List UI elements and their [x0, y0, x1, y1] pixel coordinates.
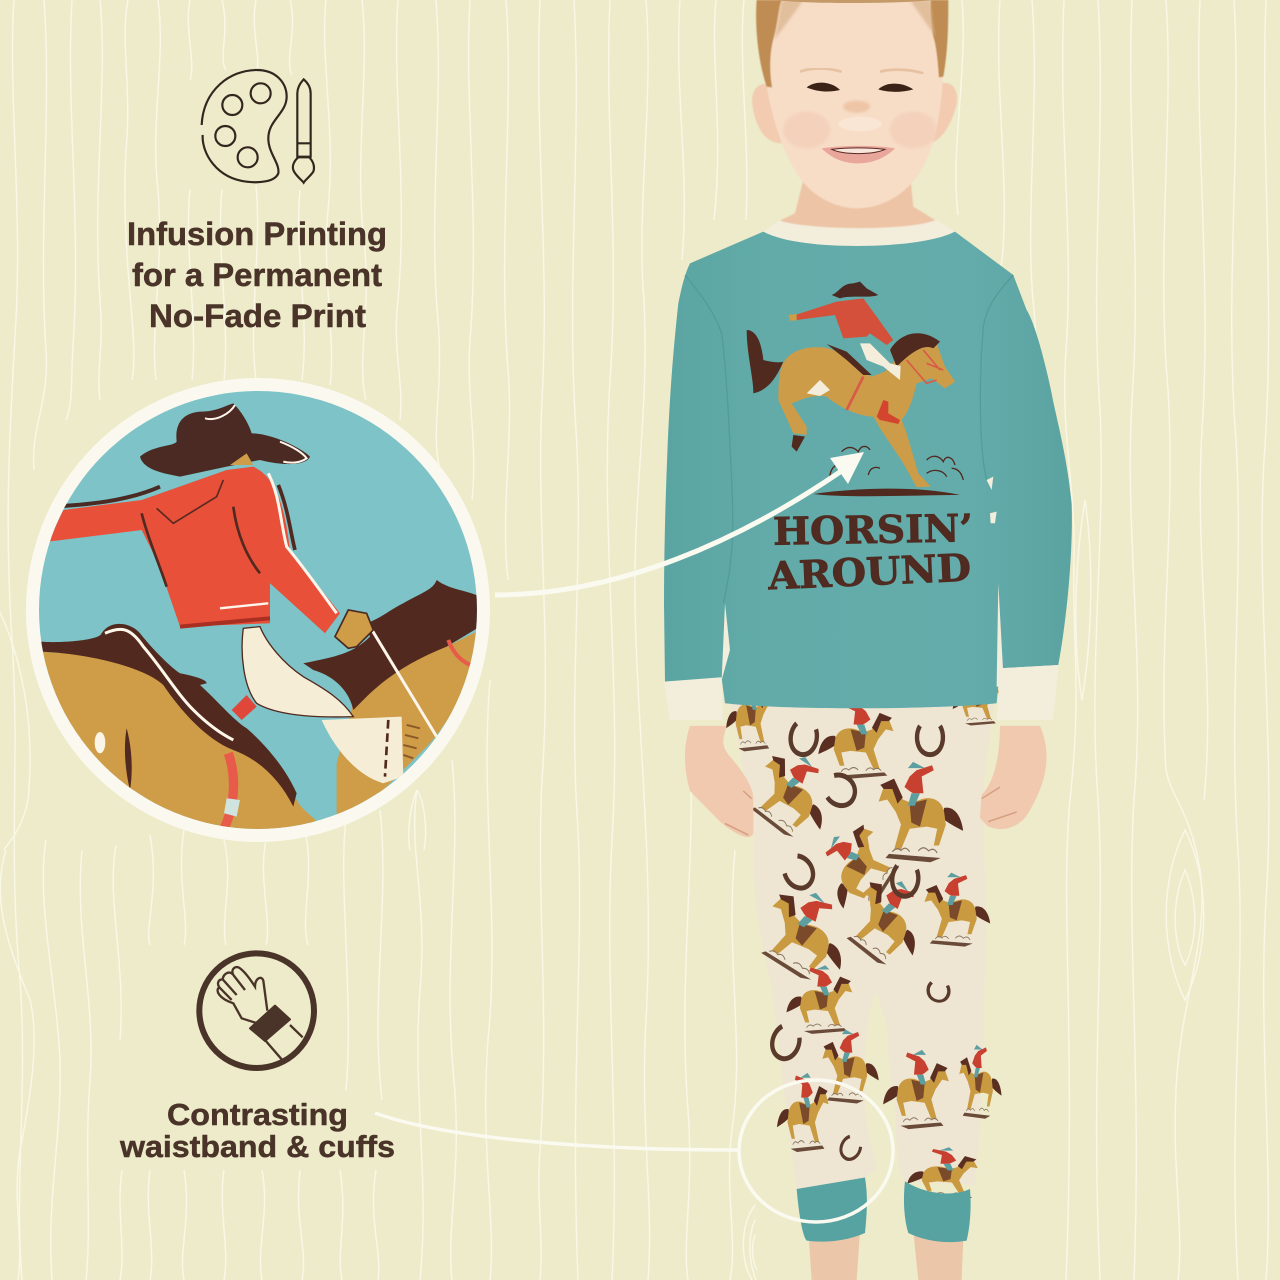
rider glove [335, 610, 373, 648]
head [752, 0, 957, 228]
girth strap [223, 753, 234, 830]
wrist band [250, 1006, 290, 1041]
rider neck [230, 453, 253, 465]
mouth [822, 146, 895, 163]
nose [838, 117, 882, 131]
hat highlight [205, 405, 307, 463]
chap stitching [385, 720, 388, 777]
cheeks [783, 112, 830, 148]
sleeve cuff right [997, 665, 1058, 720]
bare legs [808, 1231, 963, 1280]
pants print [726, 673, 1002, 1200]
girth strap [847, 377, 863, 410]
horse mane [890, 333, 940, 367]
neck [780, 173, 935, 228]
boy wearing pajamas [664, 0, 1072, 1280]
close-up artwork [37, 390, 480, 837]
reins [370, 627, 437, 737]
pants fabric [728, 688, 995, 1189]
ground shadow [813, 489, 960, 496]
horse hoof [792, 435, 805, 452]
rump mark [95, 732, 105, 753]
cuff right [904, 1181, 971, 1242]
heading: contrasting waistband and cuffs [119, 1097, 395, 1164]
girth buckle [224, 798, 240, 817]
horsin around slogan [766, 505, 973, 598]
connector to cuff [375, 1113, 738, 1150]
thigh line [125, 728, 132, 790]
collar [763, 220, 955, 246]
arrow to print detail [495, 452, 864, 595]
saddle shadow [827, 344, 872, 375]
white chap [242, 627, 353, 717]
eyebrows [800, 69, 923, 73]
callout: fabric close-up circle [26, 378, 490, 842]
bridle [907, 350, 943, 383]
fringe tassels [403, 725, 420, 758]
rump highlight [807, 380, 830, 396]
horse rump [40, 652, 327, 837]
shirt shadows and highlights [63, 473, 337, 627]
sleeve lines [265, 1025, 303, 1059]
slogan line 1: HORSIN’ [773, 505, 973, 554]
red shirt [48, 467, 340, 633]
horse tail [747, 330, 783, 393]
slogan line 2: AROUND [766, 545, 972, 598]
brush [293, 79, 314, 183]
eyes [807, 83, 913, 92]
icon: waistband and cuffs [199, 953, 314, 1068]
rider chaps [860, 343, 901, 380]
bridle [448, 640, 470, 665]
dust clouds [830, 446, 963, 480]
saddle shadow [40, 624, 297, 807]
icon ring [199, 953, 314, 1068]
ears [752, 84, 782, 143]
rider hat [832, 282, 878, 298]
face [763, 0, 943, 208]
horse neck [337, 630, 480, 818]
arrow line [495, 472, 840, 595]
hair transition [774, 0, 935, 40]
hair [756, 0, 948, 87]
rider boot [877, 400, 900, 424]
heading: infusion printing: for a Permanent [132, 257, 382, 293]
icon: paint palette and brush [202, 70, 314, 183]
heading: contrasting waistband and cuffs: waistband & cuffs [119, 1129, 395, 1164]
cuff left [797, 1178, 867, 1242]
cuff highlight circle [739, 1080, 893, 1222]
horse mane [303, 580, 480, 710]
rider hand [788, 314, 797, 321]
teeth [832, 148, 885, 154]
bucking horse print [747, 282, 963, 496]
shirt seams [685, 275, 1013, 603]
shirt body [664, 232, 1072, 708]
fringe of chap [322, 717, 403, 783]
teal fabric [37, 390, 480, 833]
long-sleeve shirt [664, 220, 1072, 720]
rider shirt [790, 298, 893, 345]
left hand [685, 726, 753, 837]
horse body [778, 342, 955, 487]
right hand [980, 726, 1047, 829]
heading: infusion printing [127, 216, 387, 334]
freckles [843, 101, 870, 113]
white ring [26, 378, 490, 842]
hair fringe [777, 0, 933, 3]
heading: infusion printing: No-Fade Print [149, 298, 366, 334]
paint wells [215, 83, 271, 167]
red strap [232, 695, 257, 720]
legs and pants [685, 673, 1047, 1280]
gaps under arms [722, 477, 1004, 687]
saddle highlight [105, 629, 233, 740]
heading: infusion printing: Infusion Printing [127, 216, 387, 252]
palette [202, 70, 287, 182]
heading: contrasting waistband and cuffs: Contrasting [167, 1097, 348, 1132]
finger creases [725, 787, 1017, 835]
rider hat [140, 403, 310, 477]
glove hand [218, 967, 267, 1023]
arrow head [830, 452, 864, 484]
sleeve cuff left [664, 677, 723, 720]
